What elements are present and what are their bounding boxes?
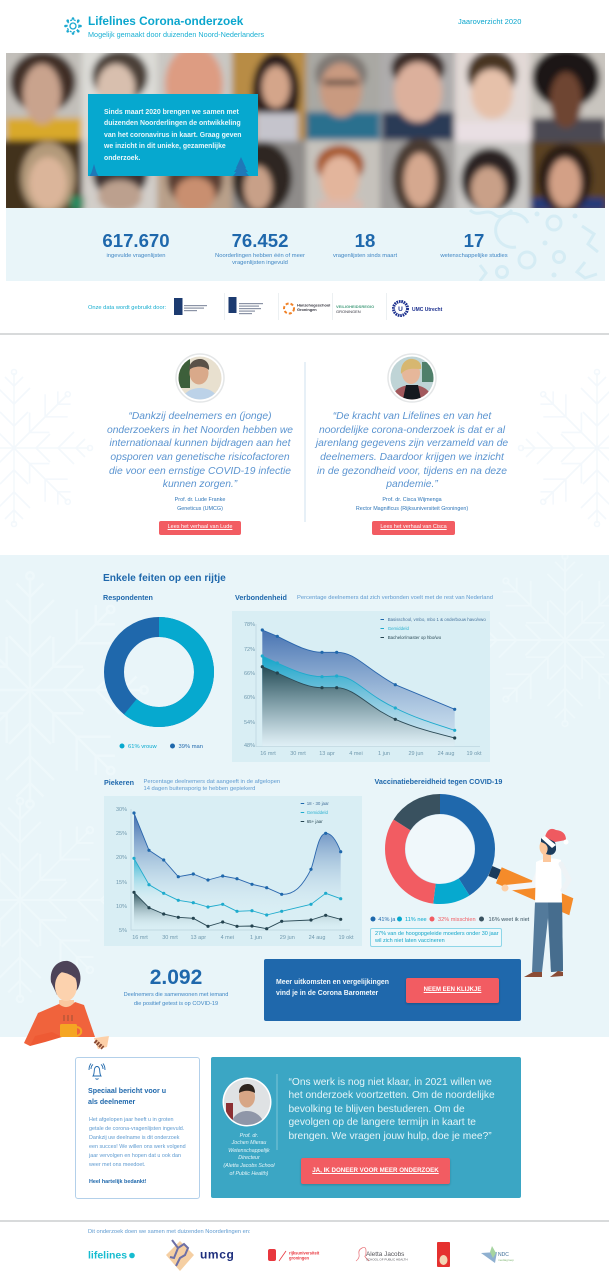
body text: Dankzij uw deelname is dit onderzoek xyxy=(89,1135,180,1141)
partner logos: NDC xyxy=(498,1252,509,1258)
heading: Verbondenheid xyxy=(235,593,493,602)
body text: getale de corona-vragenlijsten ingevuld. xyxy=(89,1126,184,1132)
chart: Piekeren line chart: 19 okt xyxy=(339,935,354,941)
quote: “De kracht van Lifelines en van het xyxy=(333,411,491,422)
body text xyxy=(88,1117,186,1168)
faces row 1 xyxy=(6,118,82,140)
label: Noorderlingen hebben één of meer xyxy=(215,253,305,259)
heading: Vaccinatiebereidheid tegen COVID-19 xyxy=(374,777,502,786)
chart: Verbondenheid line chart: 13 apr xyxy=(319,751,335,757)
chart: Verbondenheid line chart: 4 mei xyxy=(349,751,363,757)
logos xyxy=(174,293,443,320)
virus pattern xyxy=(469,209,599,281)
panel: special message card xyxy=(75,1057,200,1199)
body text: jaar vervolgen en hopen dat u ook dan xyxy=(89,1153,181,1159)
heading: Piekeren xyxy=(104,778,280,792)
quote: “Dankzij deelnemers en (jonge) xyxy=(128,411,272,422)
chart: Verbondenheid line chart: 54% xyxy=(244,720,255,726)
quote: deelnemers. Daardoor krijgen we inzicht xyxy=(320,452,504,463)
chart: Verbondenheid line chart: Basisschool, vmbo, mbo 1 & onderbouw havo/vwo xyxy=(388,617,486,622)
intro paragraph xyxy=(104,108,242,162)
subtitle: Percentage deelnemers dat aangeeft in de afgelopen xyxy=(144,779,280,785)
chart: Piekeren line chart: 24 aug xyxy=(309,935,325,941)
testimonial: Lude Franke xyxy=(107,353,293,535)
partner logos: Aletta Jacobs xyxy=(366,1251,404,1258)
panel: Corona Barometer call to action xyxy=(264,959,521,1021)
panel: facts background xyxy=(0,555,609,1037)
value: 617.670 xyxy=(102,230,170,251)
intro paragraph: van het coronavirus in kaart. Graag geven xyxy=(104,132,241,138)
statistics band xyxy=(6,208,605,281)
panel: testimonials xyxy=(0,353,609,535)
head and hat xyxy=(543,851,551,862)
subtitle: Mogelijk gemaakt door duizenden Noord-Nederlanders xyxy=(88,30,264,39)
intro text box xyxy=(88,94,258,176)
quote: noordelijke corona-onderzoek is dat er al xyxy=(319,425,505,436)
quote: in de gezondheid voor, tijdens en na deze xyxy=(317,466,507,476)
intro paragraph: onderzoek. xyxy=(104,154,140,162)
callout text xyxy=(375,931,499,944)
torso and arms xyxy=(506,866,541,888)
stat: questionnaires since March xyxy=(333,230,398,259)
callout xyxy=(370,928,502,947)
legend xyxy=(120,744,203,750)
chart: Verbondenheid line chart: 29 jun xyxy=(408,751,424,757)
subtitle: Percentage deelnemers dat zich verbonden voelt met de rest van Nederland xyxy=(297,595,493,601)
text: vind je in de Corona Barometer xyxy=(276,990,378,997)
chart: Piekeren line chart: 25% xyxy=(116,831,127,837)
data users logo row xyxy=(88,293,443,320)
partner logos: SCHOOL OF PUBLIC HEALTH xyxy=(366,1258,408,1262)
intro paragraph: we inzicht in dit unieke, gezamenlijke xyxy=(104,143,226,150)
chart: Piekeren line chart: 15% xyxy=(116,880,127,886)
magnifier handle xyxy=(488,866,502,879)
value: 2.092 xyxy=(150,966,202,989)
quote: die voor een ernstige COVID-19 infectie xyxy=(109,466,291,476)
button: Lees het verhaal van Cisca xyxy=(380,524,447,530)
legend: 11% nee xyxy=(405,917,427,923)
snowflake decorations xyxy=(0,362,609,527)
legend: 32% misschien xyxy=(438,917,476,923)
year label: Jaaroverzicht 2020 xyxy=(458,17,521,26)
chart: Verbondenheid line chart: Gemiddeld xyxy=(388,626,409,631)
button xyxy=(159,521,241,535)
quote: opsporen van genetische risicofactoren xyxy=(110,452,290,463)
chart: Verbondenheid line chart: 60% xyxy=(244,695,255,701)
label: ingevulde vragenlijsten xyxy=(106,253,165,259)
stat: 2.092 cohabitants xyxy=(124,966,228,1007)
illustration: woman with mug xyxy=(24,960,109,1050)
heading: Respondenten xyxy=(103,593,153,602)
text: Meer uitkomsten en vergelijkingen xyxy=(276,979,389,986)
quote: gevolgen op de langere termijn in kaart te xyxy=(288,1117,476,1128)
button: Lees het verhaal van Lude xyxy=(168,524,232,530)
chart: Verbondenheid line chart: 30 mrt xyxy=(290,751,306,757)
chart: Piekeren line chart: 20% xyxy=(116,855,127,861)
label xyxy=(215,253,305,266)
chart: Verbondenheid line chart: 16 mrt xyxy=(260,751,276,757)
partner logos: mediagroep xyxy=(498,1258,514,1262)
attribution: (Aletta Jacobs School xyxy=(223,1163,275,1169)
facts snowflake decoration xyxy=(0,555,609,1037)
attribution: Wetenschappelijk xyxy=(228,1148,270,1154)
attribution xyxy=(356,497,468,512)
value: 17 xyxy=(464,230,484,251)
chart: Verbondenheid line chart: 66% xyxy=(244,671,255,677)
heading: Piekeren xyxy=(104,778,134,787)
quote: het onderzoek voortzetten. Om de noordelijke xyxy=(288,1090,495,1101)
logos: U xyxy=(398,306,403,313)
body text: Het afgelopen jaar heeft u in groten xyxy=(89,1117,174,1123)
label: vragenlijsten sinds maart xyxy=(333,253,397,259)
button: JA, IK DONEER VOOR MEER ONDERZOEK xyxy=(312,1167,439,1174)
attribution xyxy=(175,497,226,512)
attribution: Rector Magnificus (Rijksuniversiteit Groningen) xyxy=(356,506,468,512)
legend: 16% weet ik niet xyxy=(488,917,530,923)
quote: pandemie.” xyxy=(386,479,438,490)
quote xyxy=(314,411,508,490)
label: wetenschappelijke studies xyxy=(440,253,508,259)
illustration: man with magnifying glass xyxy=(488,828,574,977)
legend: 41% ja xyxy=(378,917,396,923)
chart: Piekeren line chart: Gemiddeld xyxy=(307,810,328,815)
divider shadow xyxy=(0,1220,609,1222)
section heading: Enkele feiten op een rijtje xyxy=(103,573,226,584)
intro paragraph: Sinds maart 2020 brengen we samen met xyxy=(104,108,239,116)
chart: Piekeren line chart: 5% xyxy=(119,928,127,934)
quote xyxy=(107,411,293,490)
legend: 39% man xyxy=(178,744,203,750)
chart: Piekeren line chart: 13 apr xyxy=(190,935,206,941)
attribution: Prof. dr. xyxy=(240,1132,258,1138)
heading: Speciaal bericht voor u xyxy=(88,1087,166,1095)
subtitle xyxy=(144,779,280,792)
chart: vaccination willingness xyxy=(370,777,530,947)
header xyxy=(64,14,522,39)
label xyxy=(124,992,228,1007)
chart: Verbondenheid line chart: 19 okt xyxy=(467,751,482,757)
partner logos: umcg xyxy=(200,1248,234,1262)
portrait: Cisca Wijmenga xyxy=(387,353,437,403)
quote xyxy=(288,1076,495,1143)
quote: onderzoekers in het Noorden hebben we xyxy=(107,425,293,436)
label: vragenlijsten ingevuld xyxy=(232,260,288,266)
quote: internationaal kunnen bijdragen aan het xyxy=(110,438,290,449)
legend xyxy=(370,916,530,923)
callout text: wil zich niet laten vaccineren xyxy=(375,938,445,944)
chart: Piekeren line chart: 4 mei xyxy=(221,935,234,941)
partner logos xyxy=(88,1226,528,1276)
chart: Verbondenheid line chart: 72% xyxy=(244,647,255,653)
photo collage of participants xyxy=(6,53,605,208)
attribution: of Public Health) xyxy=(230,1171,268,1177)
chart: Verbondenheid line chart: 48% xyxy=(244,743,255,749)
label: die positief getest is op COVID-19 xyxy=(134,1001,218,1007)
faces row 2 xyxy=(21,142,75,214)
legs xyxy=(532,902,563,972)
stat: northerners xyxy=(215,230,305,266)
stat: scientific studies xyxy=(440,230,508,259)
button xyxy=(301,1158,450,1184)
heading: als deelnemer xyxy=(88,1098,135,1106)
chart: Verbondenheid line chart: Bachelor/master op hbo/wo xyxy=(388,635,442,640)
quote: brengen. We vragen jouw hulp, doe je mee?” xyxy=(288,1131,492,1142)
legend: 61% vrouw xyxy=(128,744,157,750)
heading: Verbondenheid xyxy=(235,593,287,602)
attribution: Jochen Mierau xyxy=(232,1140,266,1146)
chart: Verbondenheid line chart: 1 jun xyxy=(378,751,390,757)
icon: bell xyxy=(88,1063,106,1080)
stat: questionnaires filled in xyxy=(102,230,170,259)
chart: Piekeren line chart: 29 jun xyxy=(280,935,295,941)
value: 76.452 xyxy=(232,230,288,251)
portrait: Lude Franke xyxy=(175,353,225,403)
quote: “Ons werk is nog niet klaar, in 2021 willen we xyxy=(288,1076,492,1088)
donut xyxy=(104,617,214,727)
intro paragraph: duizenden Noorderlingen de ontwikkeling xyxy=(104,120,241,127)
chart: Verbondenheid line chart xyxy=(232,611,490,762)
chart: Piekeren line chart xyxy=(104,796,362,946)
attribution xyxy=(223,1132,275,1177)
callout text: 27% van de hoogopgeleide moeders onder 30 jaar xyxy=(375,931,499,937)
body text: weer met ons meedoet. xyxy=(89,1162,145,1168)
chart: Piekeren line chart: 18 - 30 jaar xyxy=(307,801,329,806)
logos: Hanzehogeschool xyxy=(297,302,330,308)
partner logos: rijksuniversiteit xyxy=(289,1250,320,1256)
value: 18 xyxy=(355,230,375,251)
label: Onze data wordt gebruikt door: xyxy=(88,305,166,311)
label: Deelnemers die samenwonen met iemand xyxy=(124,992,228,998)
logos: VEILIGHEIDSREGIO xyxy=(336,304,374,309)
thanks: Heel hartelijk bedankt! xyxy=(89,1179,147,1185)
partner logos: lifelines xyxy=(88,1250,127,1262)
panel: donation appeal xyxy=(211,1057,521,1198)
vertical divider xyxy=(276,1074,278,1150)
heading xyxy=(88,1087,166,1106)
logos: UMC Utrecht xyxy=(412,307,443,313)
chart: Piekeren line chart: 10% xyxy=(116,904,127,910)
footer label: Dit onderzoek doen we samen met duizenden Noorderlingen en: xyxy=(88,1229,251,1235)
quote: jarenlang gegevens zijn verzameld van de xyxy=(316,438,508,449)
body text: een succes! We willen ons werk volgend xyxy=(89,1144,186,1150)
quote: kunnen zorgen.” xyxy=(163,479,237,490)
icon: virus logo xyxy=(64,17,82,35)
partner logos: groningen xyxy=(289,1256,310,1260)
icon: christmas trees xyxy=(90,157,249,176)
text xyxy=(276,978,389,997)
chart: Verbondenheid line chart: 78% xyxy=(244,622,255,628)
button xyxy=(406,978,499,1003)
donut xyxy=(385,794,495,904)
chart: Piekeren line chart: 30% xyxy=(116,807,127,813)
attribution: Prof. dr. Lude Franke xyxy=(175,497,225,503)
subtitle: 14 dagen buitensporig te hebben gepiekerd xyxy=(144,786,255,792)
logos: GRONINGEN xyxy=(336,309,361,314)
button: NEEM EEN KLIJKJE xyxy=(424,987,481,993)
chart: respondents xyxy=(103,593,214,750)
testimonial: Cisca Wijmenga xyxy=(314,353,508,535)
chart: Piekeren line chart: 1 jun xyxy=(250,935,262,941)
quote: bevolking te blijven bestuderen. Om de xyxy=(288,1104,465,1115)
button xyxy=(372,521,455,535)
logos: Groningen xyxy=(297,307,317,312)
chart: Piekeren line chart: 65+ jaar xyxy=(307,819,323,824)
attribution: Prof. dr. Cisca Wijmenga xyxy=(382,497,442,503)
footer partners xyxy=(88,1226,528,1276)
divider shadow xyxy=(0,333,609,334)
attribution: Geneticus (UMCG) xyxy=(177,506,223,512)
attribution: Directeur xyxy=(238,1155,260,1161)
chart: Piekeren line chart: 30 mrt xyxy=(162,935,178,941)
chart: Verbondenheid line chart: 24 aug xyxy=(438,751,454,757)
chart: Piekeren line chart: 16 mrt xyxy=(132,935,148,941)
portrait: Jochen Mierau xyxy=(222,1078,272,1126)
title: Lifelines Corona-onderzoek xyxy=(88,14,243,28)
